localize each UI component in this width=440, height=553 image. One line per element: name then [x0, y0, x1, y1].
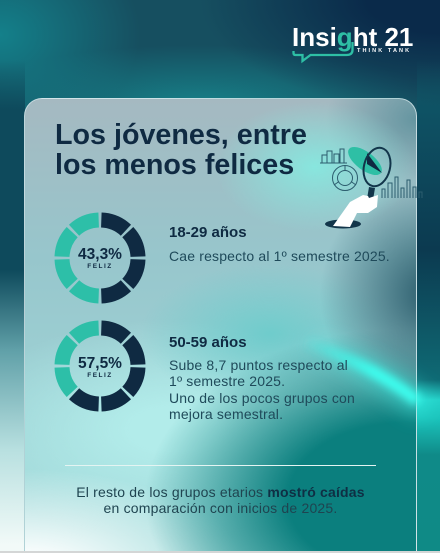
- description: [169, 357, 355, 422]
- donut label: FELIZ: [87, 263, 113, 270]
- age heading: 18-29 años: [169, 224, 247, 241]
- description: 1º semestre 2025.: [169, 373, 285, 389]
- donut value: 57,5%: [78, 354, 122, 372]
- title: Los jóvenes, entre: [55, 119, 307, 151]
- description: mejora semestral.: [169, 406, 283, 422]
- bottom edge line: [0, 551, 440, 553]
- logo wordmark: Insight 21: [292, 22, 413, 52]
- donut value: 43,3%: [78, 246, 122, 263]
- title: [55, 119, 307, 181]
- age heading: 50-59 años: [169, 334, 247, 351]
- closing note: [76, 484, 365, 516]
- donut: 43,3% feliz: [54, 212, 146, 304]
- closing note: El resto de los grupos etarios mostró caídas: [76, 484, 365, 500]
- closing note: en comparación con inicios de 2025.: [104, 500, 337, 516]
- description: Uno de los pocos grupos con: [169, 390, 355, 406]
- description: Sube 8,7 puntos respecto al: [169, 357, 348, 373]
- text block: 50-59 años: [169, 334, 355, 422]
- description: Cae respecto al 1º semestre 2025.: [169, 248, 390, 264]
- icon: magnifying glass with hand and charts: [320, 146, 422, 228]
- donut ring: [54, 320, 146, 412]
- logo tagline: THINK TANK: [357, 48, 411, 54]
- text block: 18-29 años: [169, 224, 390, 264]
- panel: glass card: [24, 98, 417, 552]
- logo speech bubble line: [292, 42, 354, 64]
- donut label: FELIZ: [87, 372, 113, 379]
- title: los menos felices: [55, 149, 294, 181]
- donut: 57,5% feliz: [54, 320, 146, 412]
- divider: [65, 465, 376, 466]
- logo: Insight 21: [292, 22, 413, 64]
- donut ring: [54, 212, 146, 304]
